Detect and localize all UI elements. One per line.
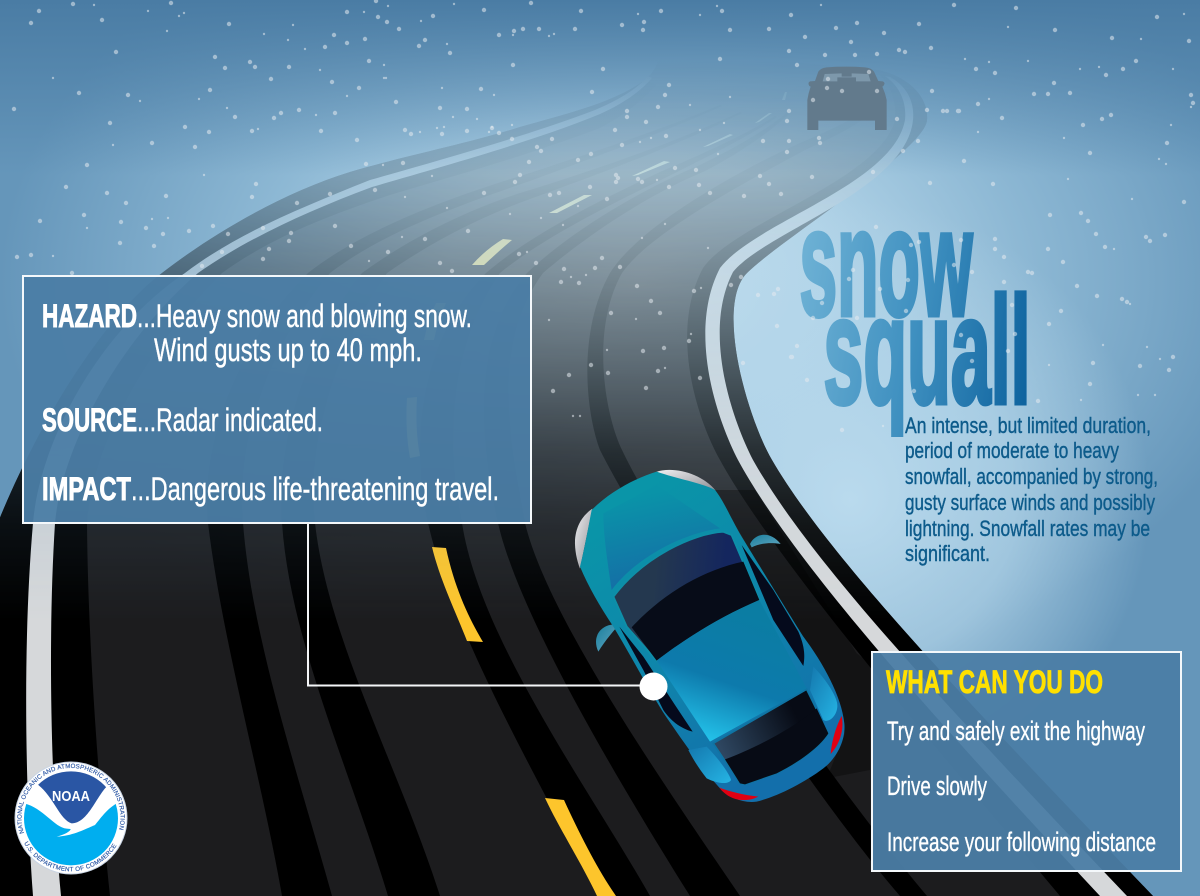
logo ring text <box>17 764 125 872</box>
blue sports car seen from above <box>575 470 870 802</box>
hazard panel <box>23 276 531 523</box>
rear fender highlights <box>688 667 837 783</box>
source line: ...Radar indicated. <box>137 402 323 438</box>
seagull tail <box>57 826 93 837</box>
what can you do panel <box>872 652 1181 871</box>
falling snow <box>14 1 1193 430</box>
title: snow squall <box>800 178 1030 436</box>
side windows <box>619 545 804 732</box>
headlights <box>575 470 716 569</box>
side mirrors <box>596 535 781 652</box>
squall description: period of moderate to heavy <box>905 438 1119 463</box>
hazard line: Wind gusts up to 40 mph. <box>154 332 422 368</box>
roof <box>657 600 807 742</box>
source line <box>42 402 323 438</box>
impact line <box>42 471 499 507</box>
seagull emblem <box>24 771 118 866</box>
yellow center line dashes <box>406 92 787 896</box>
distant car silhouette <box>807 67 887 130</box>
right white edge line <box>705 76 1127 896</box>
tail lights <box>719 716 842 800</box>
action list: Drive slowly <box>887 771 987 801</box>
impact line: IMPACT <box>42 471 131 507</box>
action list <box>887 716 1156 857</box>
hazard line: HAZARD <box>42 298 137 334</box>
NOAA logo <box>14 762 128 874</box>
left white edge line <box>26 76 652 896</box>
source line: SOURCE <box>42 402 137 438</box>
callout connector from hazard panel to car <box>308 523 668 700</box>
windshield shade <box>632 562 759 661</box>
hazard line: ...Heavy snow and blowing snow. <box>137 298 472 334</box>
hood <box>603 485 720 590</box>
title: snow squall: snow <box>800 178 973 348</box>
logo wordmark: NOAA <box>52 789 90 805</box>
squall description: significant. <box>905 541 990 566</box>
logo ring text: U.S. DEPARTMENT OF COMMERCE <box>24 841 116 872</box>
squall description <box>905 413 1158 566</box>
rear window shade <box>725 708 828 784</box>
left shoulder <box>0 156 411 896</box>
hazard line <box>42 298 472 368</box>
right shoulder <box>687 207 1153 896</box>
car shadow <box>715 490 870 778</box>
tire track bands <box>208 228 927 896</box>
impact line: ...Dangerous life-threatening travel. <box>131 471 499 507</box>
car body <box>580 472 845 802</box>
windshield <box>613 532 759 661</box>
logo ring text: NATIONAL OCEANIC AND ATMOSPHERIC ADMINISTRATION <box>17 764 125 834</box>
panel heading: WHAT CAN YOU DO <box>886 664 1103 700</box>
rear window <box>713 689 828 784</box>
